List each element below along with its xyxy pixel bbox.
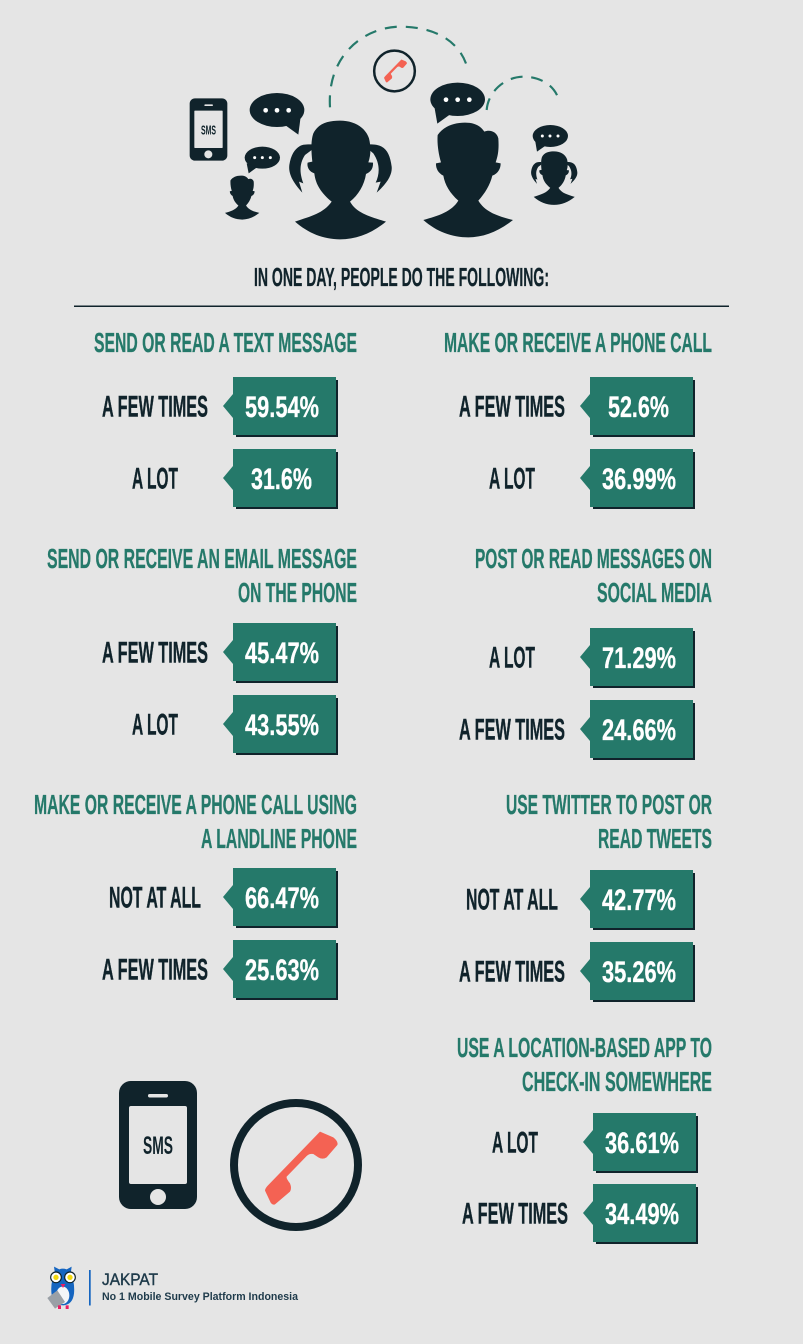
- panel: email: [47, 543, 357, 755]
- speech bubble: small right: [533, 125, 568, 152]
- icon: sms phone small: SMS: [201, 123, 216, 137]
- row: a lot: A LOT: [489, 462, 535, 496]
- row: not at all: 42.77%: [602, 884, 676, 917]
- panel: social media: [459, 543, 712, 760]
- row: a lot: A LOT: [132, 462, 178, 496]
- row: a lot: [492, 1113, 698, 1173]
- icon: sms phone small: [190, 98, 227, 161]
- speech bubble: small left: [245, 147, 280, 173]
- heading: [34, 789, 357, 854]
- row: a few times: A FEW TIMES: [462, 1198, 568, 1230]
- heading: [47, 543, 357, 608]
- row: a few times: 35.26%: [602, 956, 676, 989]
- row: a few times: [102, 377, 338, 437]
- row: a lot: 31.6%: [251, 463, 312, 496]
- row: a lot: A LOT: [492, 1126, 538, 1160]
- heading: MAKE OR RECEIVE A PHONE CALL USING: [34, 789, 357, 820]
- row: a lot: [489, 628, 695, 688]
- row: a few times: [102, 623, 338, 683]
- panel: text message: [94, 327, 357, 509]
- row: a few times: [462, 1184, 698, 1244]
- heading: A LANDLINE PHONE: [201, 823, 357, 854]
- row: a lot: [132, 695, 338, 755]
- dashed arc: small: [487, 77, 559, 110]
- row: a few times: A FEW TIMES: [459, 956, 565, 988]
- panel: location app: [457, 1032, 712, 1244]
- row: a few times: 25.63%: [245, 954, 319, 987]
- row: a few times: A FEW TIMES: [102, 390, 208, 424]
- icon: small phone call circle: [374, 51, 415, 91]
- heading: [457, 1032, 712, 1097]
- row: a lot: [132, 449, 338, 509]
- panel: phone call: [444, 327, 712, 509]
- row: a few times: A FEW TIMES: [459, 714, 565, 746]
- row: a few times: A FEW TIMES: [102, 954, 208, 986]
- icon: large phone handset in circle: [234, 1103, 358, 1227]
- row: a lot: 36.99%: [602, 463, 676, 496]
- row: a few times: [459, 700, 695, 760]
- row: a few times: 45.47%: [245, 637, 319, 670]
- heading: SEND OR READ A TEXT MESSAGE: [94, 327, 357, 358]
- icon: large sms phone: SMS: [143, 1132, 173, 1160]
- row: a lot: A LOT: [489, 642, 535, 674]
- tagline: No 1 Mobile Survey Platform Indonesia: [102, 1291, 299, 1303]
- icon: large sms phone: [119, 1081, 197, 1209]
- heading: READ TWEETS: [598, 823, 712, 854]
- logo: JAKPAT: [47, 1267, 299, 1309]
- row: not at all: NOT AT ALL: [109, 882, 201, 914]
- row: a few times: A FEW TIMES: [102, 636, 208, 670]
- row: a few times: 24.66%: [602, 714, 676, 747]
- row: not at all: [109, 868, 338, 928]
- row: not at all: [466, 870, 695, 930]
- speech bubble: upper right: [430, 83, 485, 124]
- heading: [506, 789, 712, 854]
- row: a lot: 43.55%: [245, 709, 319, 742]
- row: not at all: 66.47%: [245, 882, 319, 915]
- main heading: IN ONE DAY, PEOPLE DO THE FOLLOWING:: [254, 262, 549, 292]
- row: a few times: [459, 942, 695, 1002]
- row: a few times: 59.54%: [245, 391, 319, 424]
- row: a few times: [459, 377, 695, 437]
- row: a lot: 71.29%: [602, 642, 676, 675]
- row: a few times: A FEW TIMES: [459, 390, 565, 424]
- heading: SEND OR RECEIVE AN EMAIL MESSAGE: [47, 543, 357, 574]
- icon: owl: [47, 1267, 75, 1309]
- heading: SOCIAL MEDIA: [597, 577, 712, 608]
- row: a few times: 52.6%: [608, 391, 669, 424]
- brand name: JAKPAT: [102, 1271, 158, 1289]
- heading: ON THE PHONE: [238, 577, 357, 608]
- silhouette: small boy: [225, 176, 259, 220]
- silhouette: large boy: [423, 123, 513, 237]
- row: a lot: [489, 449, 695, 509]
- row: not at all: NOT AT ALL: [466, 884, 558, 916]
- row: a few times: [102, 940, 338, 1000]
- divider: [89, 1270, 91, 1306]
- row: a lot: 36.61%: [605, 1127, 679, 1160]
- top illustration: people communicating: [190, 27, 577, 239]
- panel: twitter: [459, 789, 712, 1002]
- dashed arc: large: [330, 27, 468, 107]
- panel: landline: [34, 789, 357, 1000]
- speech bubble: upper left: [250, 93, 304, 135]
- row: a few times: 34.49%: [605, 1198, 679, 1231]
- silhouette: large girl: [289, 121, 392, 239]
- silhouette: small girl: [531, 151, 577, 205]
- row: a lot: A LOT: [132, 708, 178, 742]
- heading: [475, 543, 712, 608]
